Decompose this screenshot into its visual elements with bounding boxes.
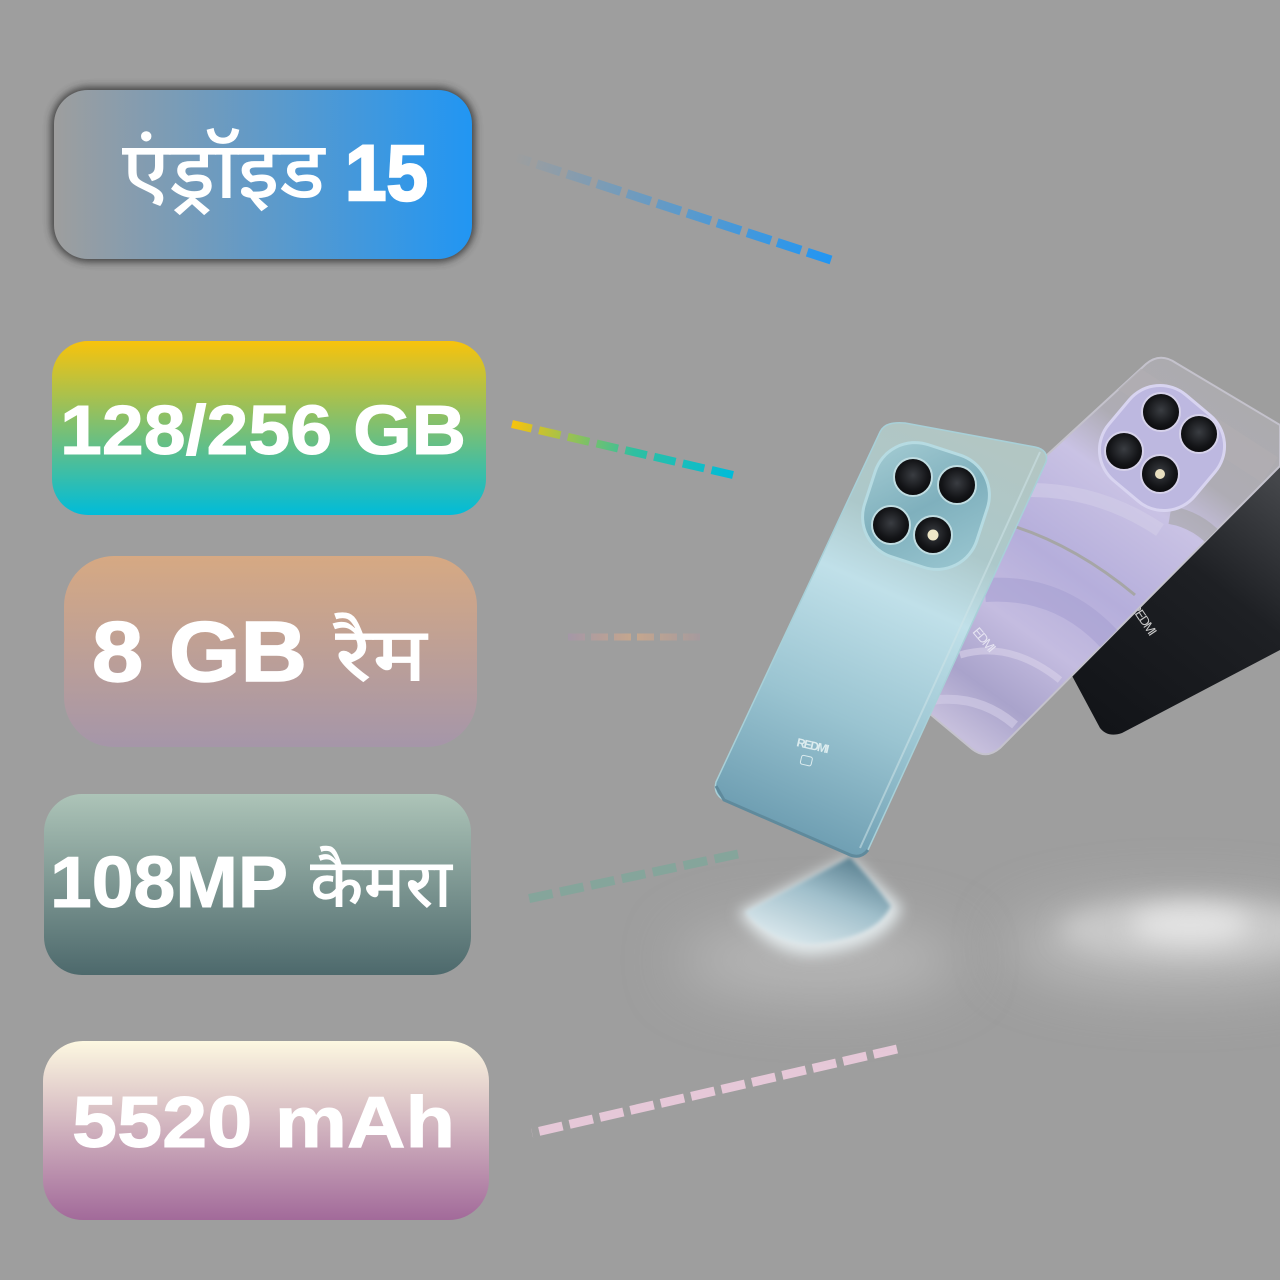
connector: battery	[532, 1049, 897, 1133]
label: Android 15: एंड्रॉइड	[122, 126, 326, 231]
cone reflection	[745, 857, 891, 944]
label: camera word: कैमरा	[310, 846, 454, 935]
connector: storage	[512, 424, 733, 475]
panel: storage	[52, 341, 486, 515]
blue camera island	[852, 432, 1000, 580]
label: 8 GB: 8 GB	[92, 605, 307, 700]
panel: camera	[44, 794, 471, 975]
panel: battery	[43, 1041, 489, 1220]
purple wave pattern	[936, 369, 1218, 728]
blue phone bottom edge	[716, 786, 868, 856]
purple flash	[1155, 469, 1165, 479]
label: 108MP: 108MP	[50, 843, 288, 923]
label: storage: 128/256 GB	[60, 391, 466, 469]
blue phone rim	[860, 452, 1040, 848]
label: battery capacity: 5520 mAh	[72, 1083, 455, 1163]
connector: RAM	[567, 634, 700, 640]
number: 15: 15	[345, 128, 428, 217]
phone: purple	[930, 358, 1280, 754]
purple lenses	[1105, 393, 1218, 493]
purple phone brand: EDMI	[970, 624, 999, 655]
phone: dark	[1070, 465, 1280, 735]
phone: blue	[715, 423, 1047, 856]
dark phone brand: REDMI	[1128, 600, 1160, 639]
5G badge	[800, 755, 813, 766]
reflection on floor	[680, 857, 1280, 998]
label: RAM word: रैम	[332, 613, 429, 713]
connector: camera	[527, 854, 738, 899]
connector: Android	[515, 157, 831, 260]
blue phone brand: REDMI	[795, 735, 831, 756]
panel: RAM	[64, 556, 477, 747]
blue lenses	[872, 458, 976, 554]
panel: Android 15	[51, 87, 475, 262]
blue flash	[928, 530, 938, 540]
purple camera island	[1083, 369, 1241, 527]
